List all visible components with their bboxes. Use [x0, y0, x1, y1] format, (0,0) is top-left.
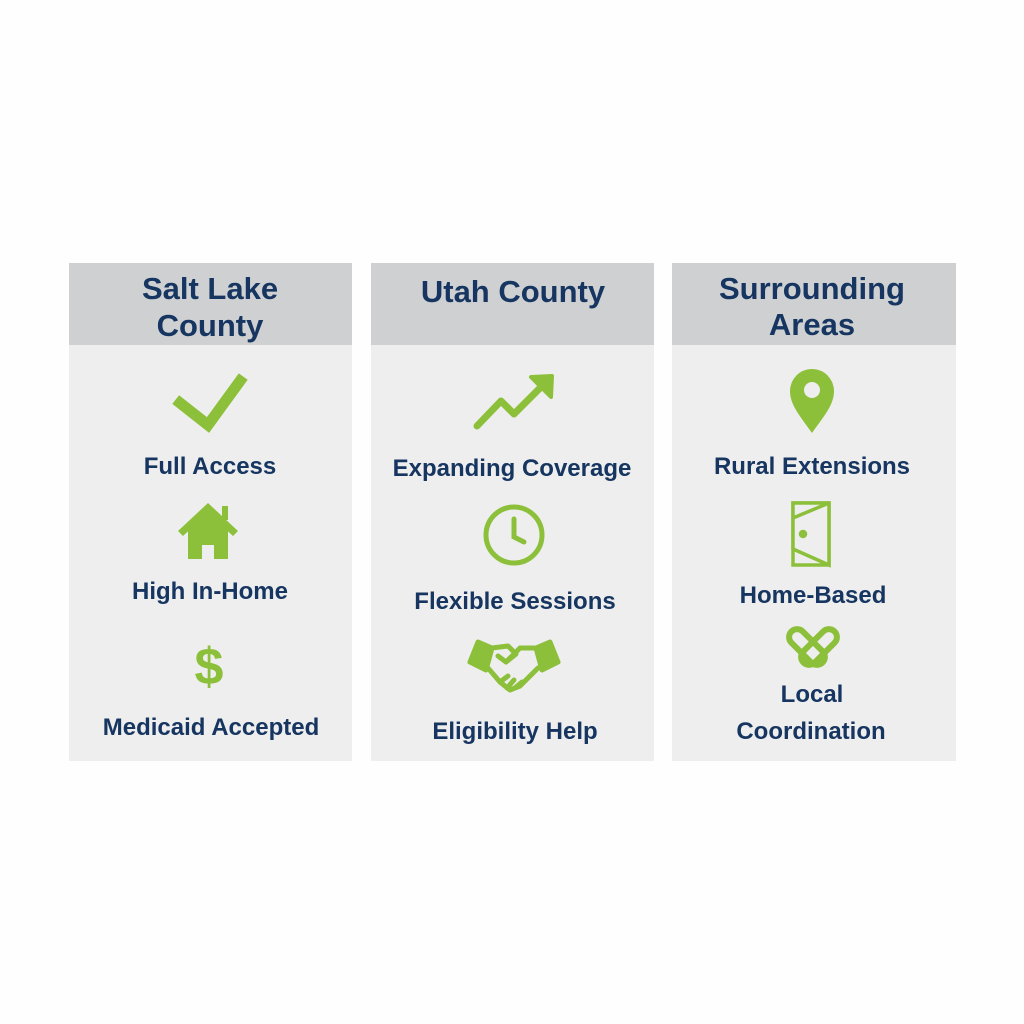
icon: map pin [790, 369, 834, 433]
icon: dollar: $ [195, 638, 224, 696]
panel: Salt Lake County [69, 263, 352, 761]
label: Rural Extensions: Rural Extensions [714, 453, 910, 480]
icon: door [793, 503, 829, 565]
icon: handshake [470, 642, 558, 690]
heading: Surrounding Areas: Surrounding [719, 271, 905, 306]
heading: Salt Lake County: County [157, 308, 264, 343]
panel: Utah County [371, 263, 654, 761]
heading: Utah County: Utah County [421, 274, 606, 309]
heading: Surrounding Areas [719, 271, 905, 342]
label: Home-Based: Home-Based [740, 582, 886, 609]
label: High In-Home: High In-Home [132, 578, 288, 605]
icon: chain link [786, 626, 840, 668]
label: Eligibility Help: Eligibility Help [432, 718, 598, 745]
heading: Salt Lake County [142, 271, 278, 343]
heading: Salt Lake County: Salt Lake [142, 271, 278, 306]
label: Flexible Sessions: Flexible Sessions [414, 588, 616, 615]
label: Full Access: Full Access [144, 453, 276, 480]
label: Local Coordination [736, 681, 886, 745]
label: Medicaid Accepted: Medicaid Accepted [103, 714, 319, 741]
panel: Surrounding Areas [672, 263, 956, 761]
label: Expanding Coverage: Expanding Coverage [393, 455, 631, 482]
icon: house [178, 503, 238, 559]
icon: trend arrow [477, 376, 552, 426]
icon: checkmark [180, 381, 240, 425]
label: Local Coordination: Coordination [736, 718, 886, 745]
icon: clock [486, 507, 542, 563]
heading: Surrounding Areas: Areas [769, 307, 855, 342]
label: Local Coordination: Local [781, 681, 843, 708]
